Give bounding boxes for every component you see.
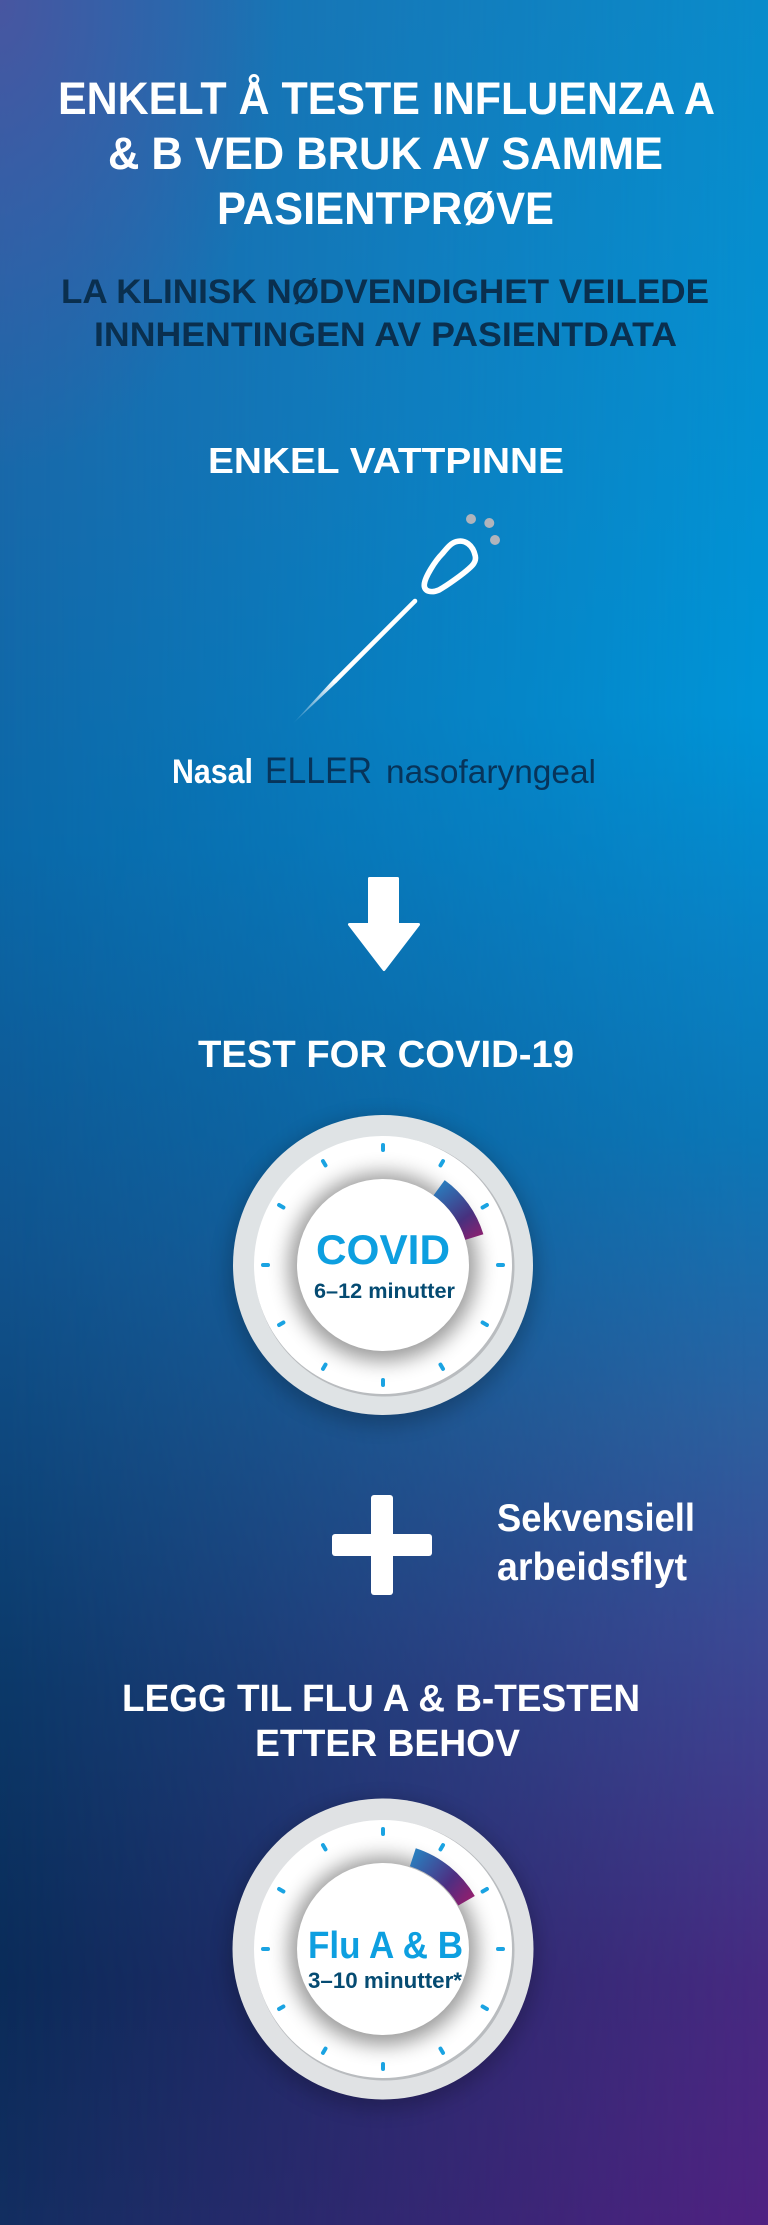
heading: covid test: TEST FOR COVID-19 [198, 1034, 574, 1076]
subtitle: LA KLINISK NØDVENDIGHET VEILEDE [61, 273, 709, 311]
dial label: flu: Flu A & B [308, 1925, 463, 1967]
subtitle: INNHENTINGEN AV PASIENTDATA [94, 316, 677, 354]
title: ENKELT Å TESTE INFLUENZA A [58, 73, 715, 124]
swab type label: Nasal [172, 753, 253, 791]
heading: add flu test: LEGG TIL FLU A & B-TESTEN [122, 1678, 640, 1720]
dial time: covid: 6–12 minutter [314, 1280, 455, 1303]
sequential workflow label: Sekvensiell [497, 1497, 695, 1540]
swab type label [172, 750, 596, 791]
icon: swab [292, 514, 500, 724]
title [58, 73, 715, 234]
sequential workflow label: arbeidsflyt [497, 1546, 687, 1589]
panel: flu timer dial [229, 1798, 537, 2109]
swab type label: ELLER [265, 750, 372, 791]
swab type label: nasofaryngeal [386, 753, 596, 790]
title: PASIENTPRØVE [217, 183, 554, 234]
dial label: covid: COVID [316, 1226, 450, 1273]
heading: single swab: ENKEL VATTPINNE [208, 440, 564, 481]
subtitle [61, 273, 709, 354]
title: & B VED BRUK AV SAMME [108, 128, 663, 179]
sequential workflow label [497, 1497, 695, 1589]
panel: covid timer dial [229, 1115, 537, 1425]
heading: add flu test [122, 1678, 640, 1765]
icon: plus [332, 1495, 432, 1595]
arrow: down [350, 878, 418, 970]
heading: add flu test: ETTER BEHOV [255, 1723, 521, 1765]
dial time: flu: 3–10 minutter* [308, 1968, 462, 1993]
